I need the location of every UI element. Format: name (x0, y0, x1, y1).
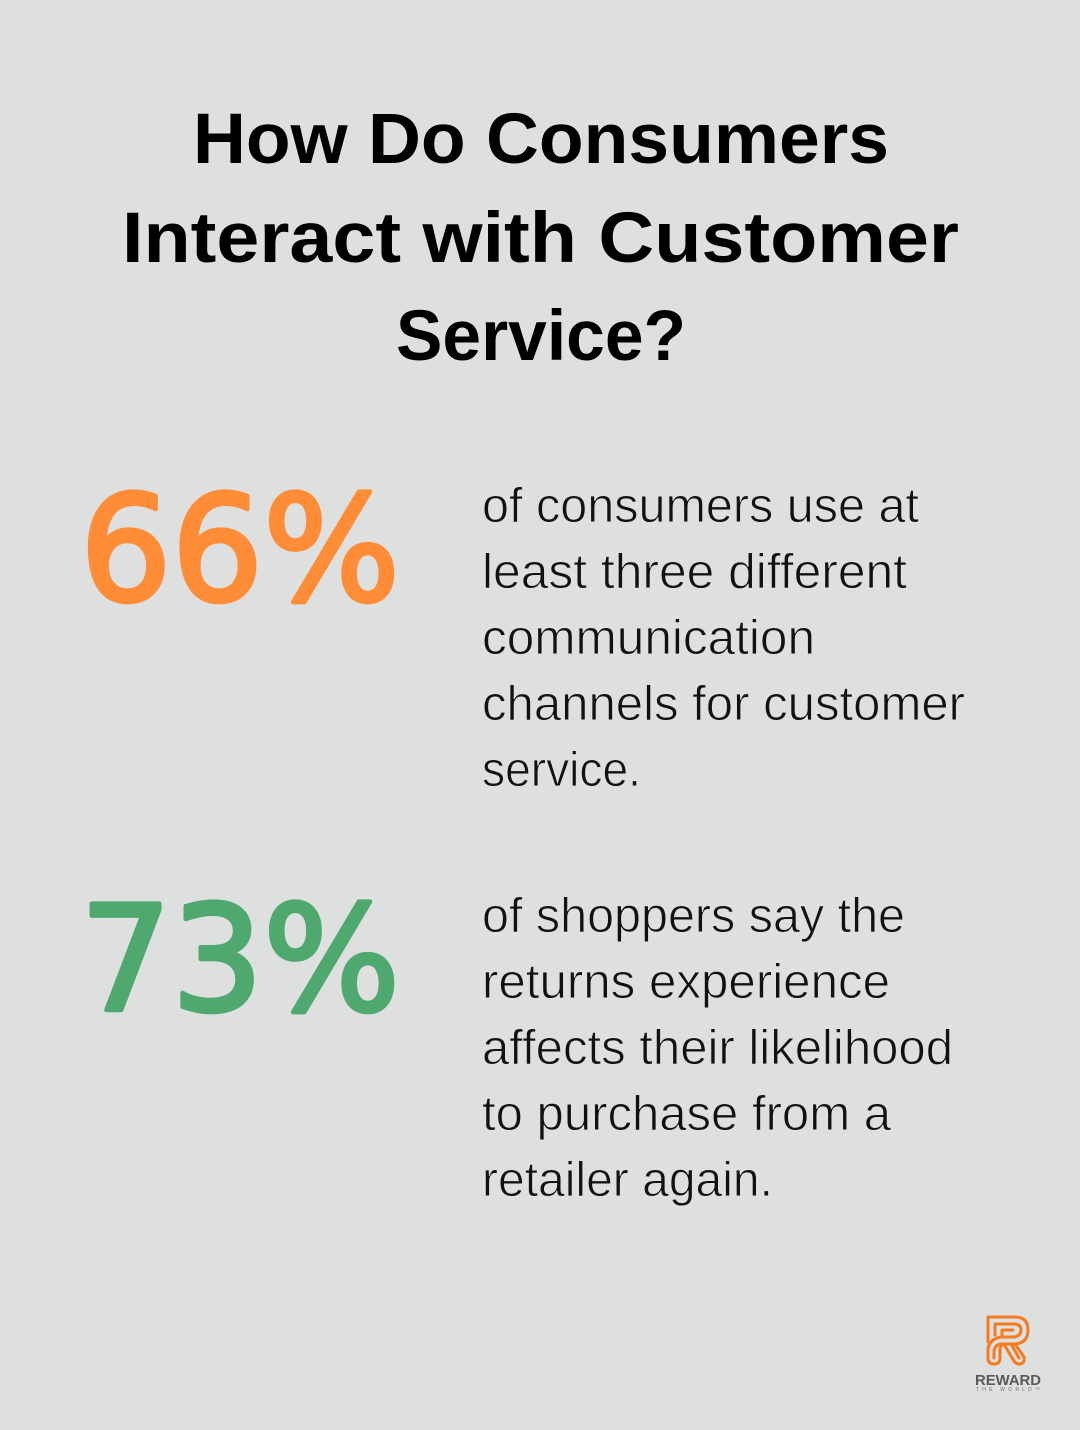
text: 73% description: of shoppers say the (482, 889, 905, 943)
title: How Do Consumers (193, 100, 889, 179)
text: 73% description: to purchase from a (482, 1087, 892, 1141)
text: 73% description (482, 889, 953, 1207)
logo: Reward the World (975, 1317, 1041, 1393)
title: Interact with Customer (122, 199, 959, 278)
tagline: THE WORLD™ (976, 1387, 1040, 1393)
stat: 66%: 66% (80, 465, 400, 635)
icon: R mark (988, 1317, 1028, 1364)
text: 66% description: service. (482, 743, 641, 797)
text: 66% description: communication (482, 611, 815, 665)
text: 73% description: retailer again. (482, 1153, 773, 1207)
text: 66% description: of consumers use at (482, 479, 919, 533)
text: 66% description: least three different (482, 545, 907, 599)
wordmark: REWARD (975, 1373, 1041, 1389)
stat: 73%: 73% (80, 875, 400, 1045)
text: 66% description (482, 479, 965, 797)
text: 66% description: channels for customer (482, 677, 965, 731)
text: 73% description: affects their likelihood (482, 1021, 953, 1075)
title (122, 100, 959, 376)
title: Service? (396, 297, 686, 376)
text: 73% description: returns experience (482, 955, 890, 1009)
